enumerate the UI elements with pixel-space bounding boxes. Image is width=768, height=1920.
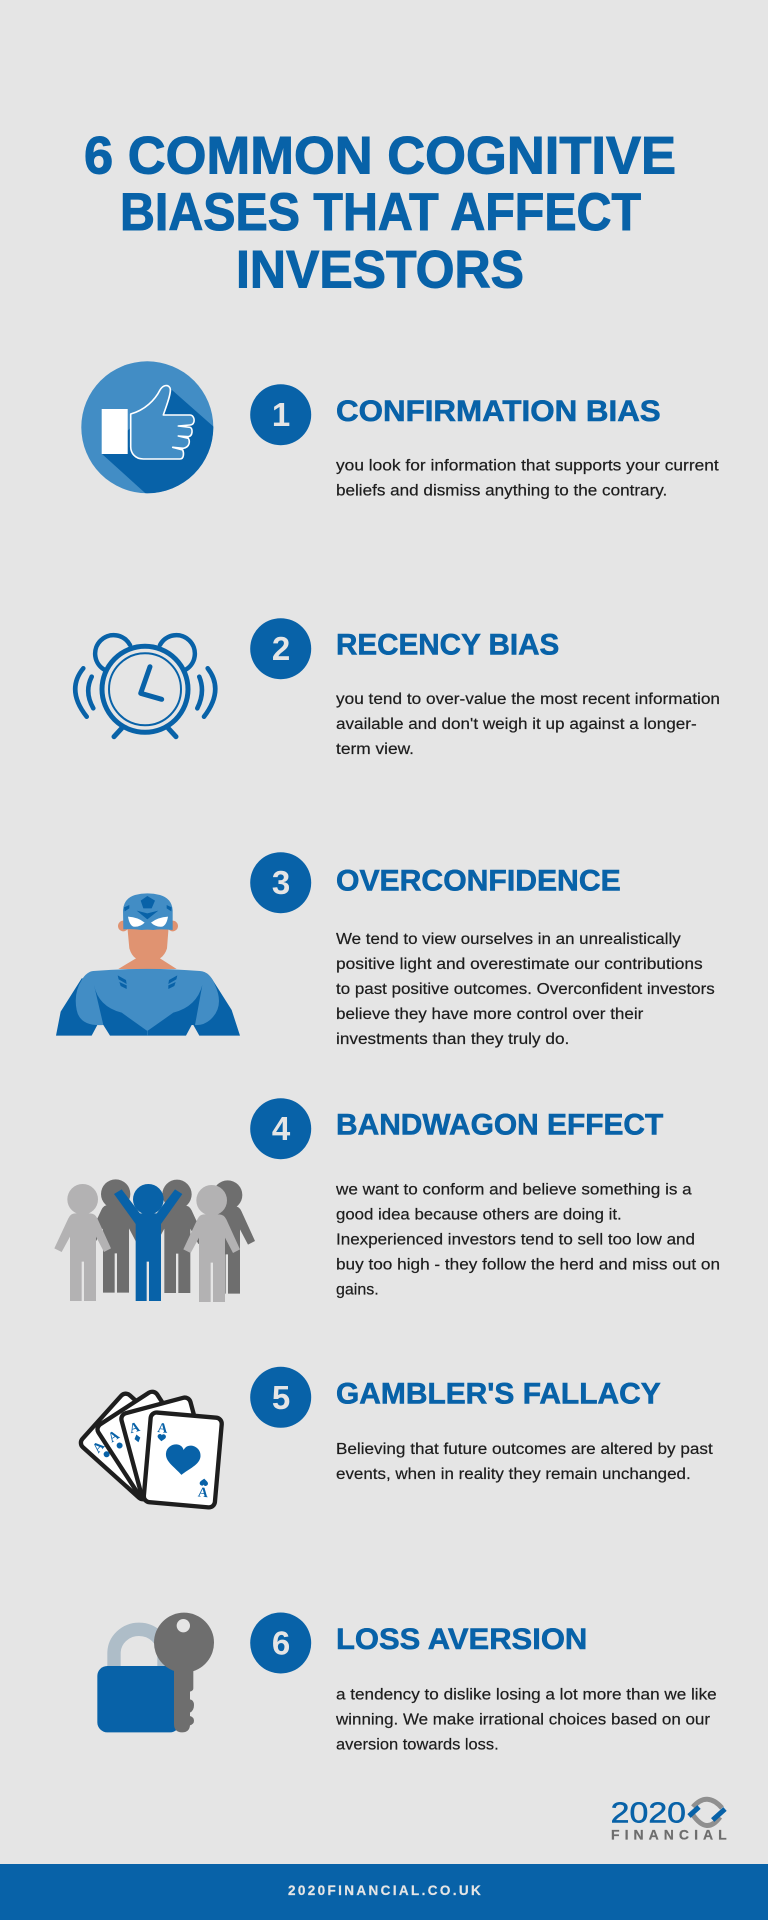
logo: 2020 Financial: 2020 (611, 1797, 686, 1829)
number badge 3: 3 (272, 864, 290, 901)
body text: believe they have more control over their (336, 1006, 643, 1023)
heading: BANDWAGON EFFECT (336, 1108, 663, 1141)
footer bar: 2020FINANCIAL.CO.UK (288, 1883, 481, 1898)
body text (336, 691, 720, 758)
title: BIASES THAT AFFECT (120, 183, 641, 242)
body text: Inexperienced investors tend to sell too low and (336, 1232, 695, 1249)
icon: thumbs up (81, 361, 214, 494)
heading: GAMBLER'S FALLACY (336, 1377, 661, 1410)
panel: recency bias (75, 618, 720, 758)
body text (335, 1182, 720, 1299)
body text (336, 458, 719, 500)
body text: winning. We make irrational choices based on our (335, 1711, 710, 1728)
number badge 1 (250, 384, 311, 445)
body text: we want to conform and believe something is a (335, 1182, 692, 1199)
icon: four aces playing cards: A (106, 1428, 122, 1446)
body text: beliefs and dismiss anything to the contrary. (336, 483, 667, 500)
panel: overconfidence (56, 852, 715, 1048)
heading: RECENCY BIAS (336, 628, 559, 661)
icon: four aces playing cards: A (157, 1421, 168, 1437)
body text: investments than they truly do. (336, 1031, 569, 1048)
body text: aversion towards loss. (336, 1736, 499, 1753)
body text: positive light and overestimate our contributions (336, 956, 703, 973)
heading: CONFIRMATION BIAS (336, 395, 661, 428)
number badge 1: 1 (272, 396, 290, 433)
body text (336, 1441, 713, 1483)
body text: gains. (336, 1282, 379, 1299)
body text: you tend to over-value the most recent information (336, 691, 720, 708)
body text: buy too high - they follow the herd and miss out on (336, 1257, 720, 1274)
number badge 2: 2 (272, 630, 290, 667)
icon: padlock and key (97, 1613, 214, 1732)
body text: you look for information that supports your current (336, 458, 719, 475)
body text: events, when in reality they remain unchanged. (336, 1466, 691, 1483)
icon: four aces playing cards: A (197, 1485, 209, 1501)
number badge 3 (250, 852, 311, 913)
number badge 5 (250, 1367, 311, 1428)
body text: available and don't weigh it up against a longer- (336, 716, 697, 733)
logo: 2020 Financial (611, 1797, 727, 1843)
icon: masked superhero (56, 893, 240, 1036)
number badge 5: 5 (272, 1379, 290, 1416)
icon: crowd of people (54, 1179, 255, 1302)
body text: good idea because others are doing it. (336, 1207, 622, 1224)
number badge 6: 6 (272, 1624, 290, 1662)
number badge 4 (250, 1098, 311, 1159)
icon: four aces playing cards: A (128, 1420, 142, 1437)
title: INVESTORS (236, 240, 524, 300)
footer bar (0, 1864, 768, 1920)
panel: bandwagon effect (54, 1098, 720, 1302)
heading: OVERCONFIDENCE (336, 865, 621, 898)
body text (336, 931, 715, 1048)
icon: four aces playing cards: A (90, 1439, 108, 1456)
logo: 2020 Financial: FINANCIAL (611, 1827, 727, 1843)
panel: confirmation bias (81, 361, 719, 500)
body text: Believing that future outcomes are altered by past (336, 1441, 713, 1458)
number badge 2 (250, 618, 311, 679)
number badge 6 (250, 1612, 311, 1674)
icon: four aces playing cards (78, 1389, 222, 1508)
body text: We tend to view ourselves in an unrealistically (336, 931, 681, 948)
panel: loss aversion (97, 1612, 717, 1753)
panel: gambler's fallacy (78, 1367, 713, 1508)
body text: term view. (336, 741, 414, 758)
heading: LOSS AVERSION (336, 1623, 587, 1656)
body text (335, 1686, 717, 1753)
body text: to past positive outcomes. Overconfident investors (336, 981, 715, 998)
title (84, 126, 676, 300)
number badge 4: 4 (272, 1110, 291, 1147)
icon: alarm clock (75, 635, 215, 737)
body text: a tendency to dislike losing a lot more than we like (336, 1686, 717, 1703)
title: 6 COMMON COGNITIVE (84, 126, 676, 186)
